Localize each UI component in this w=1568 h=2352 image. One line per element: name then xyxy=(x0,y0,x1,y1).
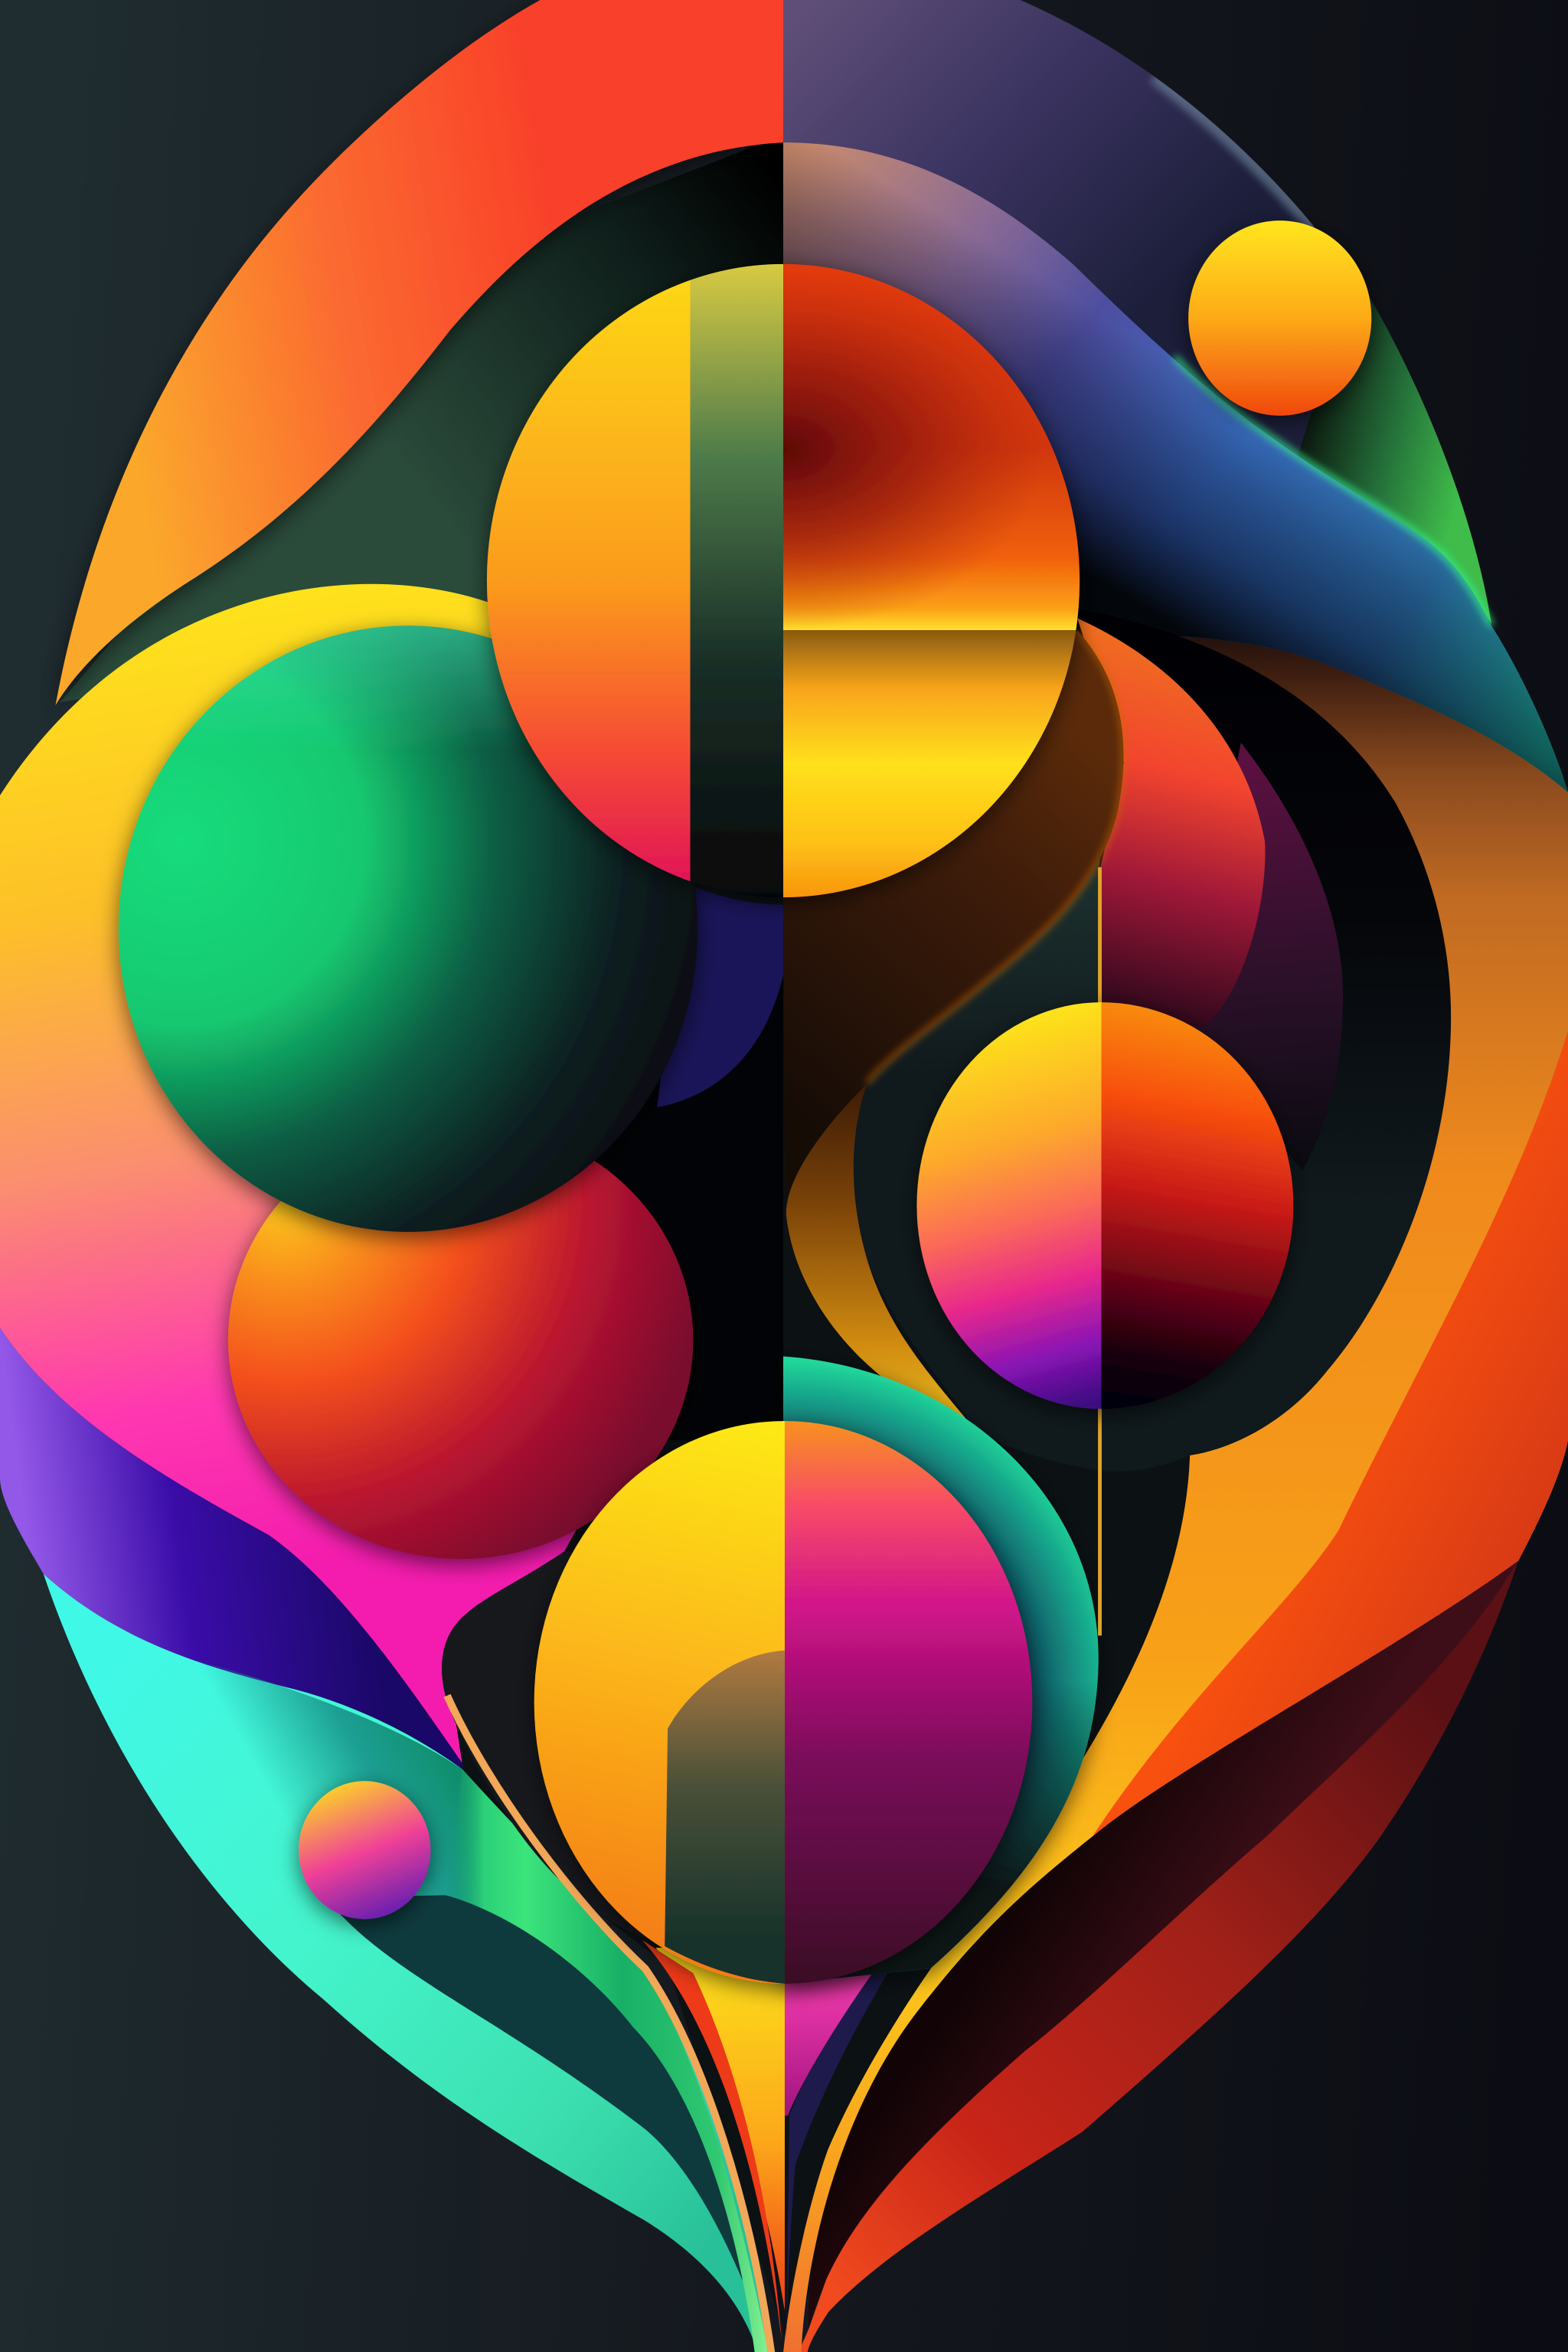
dark teal shadow swoosh xyxy=(322,1895,755,2311)
gold vertical line xyxy=(1099,867,1101,1635)
right half xyxy=(785,1421,1032,1984)
bright green stripe xyxy=(446,1769,768,2352)
panel: dark pocket beside bottom circle xyxy=(442,1551,666,1946)
navy shading on swoosh xyxy=(783,142,1568,792)
right half xyxy=(1101,1002,1293,1409)
dark interior of the blob xyxy=(150,135,1200,2341)
panel: grey purple top right lobe xyxy=(783,0,1315,456)
inner arch xyxy=(665,1651,785,1984)
green edge highlight xyxy=(1175,357,1491,626)
panel: plum crescent xyxy=(1185,743,1343,1171)
bottom right yellow quadrant xyxy=(783,630,1091,908)
multicolour stem line xyxy=(447,1696,771,2352)
panel: blue swoosh xyxy=(783,142,1568,792)
panel: red back circle xyxy=(1077,618,1265,1027)
left half xyxy=(916,1002,1101,1409)
left half xyxy=(534,1421,785,1984)
top right red quadrant xyxy=(783,255,1091,630)
panel: teal ring behind bottom circle xyxy=(783,1357,1099,1984)
panel: orange red stripe xyxy=(1093,1031,1568,1837)
icon: small pink circle xyxy=(299,1781,430,1919)
icon: small gold circle xyxy=(1188,220,1371,416)
panel: navy strip xyxy=(786,1960,896,2341)
panel: orange crescent xyxy=(786,1083,975,1430)
quadrant shading xyxy=(783,289,1014,624)
panel: yellow wedge below bottom circle xyxy=(655,1948,785,2311)
green vertical band xyxy=(691,264,783,897)
panel: green crescent behind small gold circle xyxy=(1253,278,1491,624)
orange edge of brown swoosh xyxy=(867,630,1124,1083)
panel: dark ring left part xyxy=(853,841,1109,1471)
panel: pink wedge below bottom circle xyxy=(785,1965,877,2115)
panel: yellow to pink left body xyxy=(0,584,593,1763)
panel: purple band xyxy=(0,1328,462,1769)
left yellow to pink segment xyxy=(480,255,691,908)
panel: navy piece under circle xyxy=(657,882,783,1107)
panel: teal band xyxy=(44,1574,773,2352)
panel: dark right interior xyxy=(1073,608,1451,1472)
panel: right middle circle xyxy=(916,1002,1293,1409)
panel: orange right ring xyxy=(783,618,1568,2352)
panel: green sphere xyxy=(105,616,705,1232)
teal shading xyxy=(195,1660,630,1958)
teal ring bottom shading xyxy=(783,1357,1099,1984)
panel: red sphere xyxy=(228,1121,693,1559)
panel: red lower right petal xyxy=(799,1560,1518,2352)
panel: dark green field under the orange lobe xyxy=(60,135,783,702)
panel: orange top left lobe xyxy=(56,0,783,705)
panel: red strip of the wedge xyxy=(642,1940,782,2341)
panel: black centre column xyxy=(570,975,783,1440)
panel: brown swoosh xyxy=(783,630,1124,1200)
teal top glow xyxy=(194,626,524,750)
panel: top centre circle xyxy=(480,255,1091,908)
panel: bottom circle xyxy=(534,1421,1032,1984)
lobe edge highlight xyxy=(1155,75,1318,228)
panel: dark lower right petal xyxy=(808,1560,1518,2329)
